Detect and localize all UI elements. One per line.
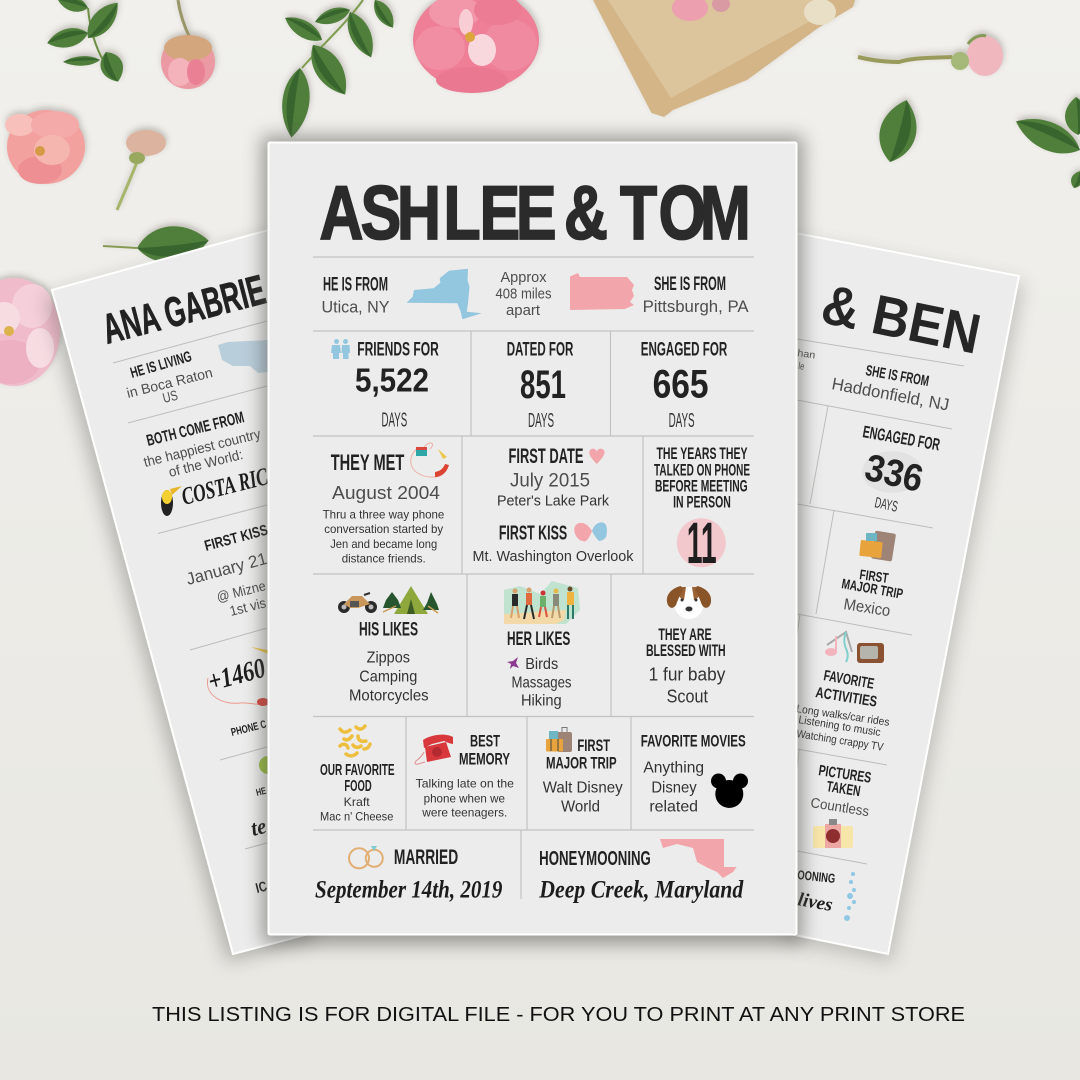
dated for: DATED FOR bbox=[507, 340, 573, 360]
our favorite food: OUR FAVORITE bbox=[320, 762, 395, 779]
they met: distance friends. bbox=[342, 552, 426, 566]
leaves far right bbox=[1010, 96, 1080, 190]
icon: mouse ears bbox=[711, 774, 748, 808]
engaged for: 665 bbox=[653, 362, 709, 406]
icon: dog bbox=[667, 586, 711, 619]
first major trip bbox=[543, 736, 623, 816]
right card dividers and text: Mexico bbox=[842, 596, 892, 620]
left card dividers and text: in Boca Raton bbox=[125, 364, 214, 401]
her likes: Hiking bbox=[521, 693, 562, 710]
right card dividers and text: Haddonfield, NJ bbox=[830, 374, 951, 415]
phone cord and plane bbox=[207, 647, 269, 706]
right card dividers and text bbox=[796, 339, 964, 916]
map: Pennsylvania bbox=[570, 273, 634, 310]
left card dividers and text: HE IS LIVING bbox=[128, 348, 194, 382]
right card dividers and text: DAYS bbox=[873, 494, 899, 516]
friends for: DAYS bbox=[382, 410, 407, 432]
left card title: ANA GABRIE bbox=[97, 266, 270, 353]
grid lines bbox=[313, 257, 754, 899]
blessed with: THEY ARE bbox=[658, 625, 712, 644]
grey ellipse behind engaged number bbox=[862, 451, 922, 493]
panel: main card bbox=[268, 142, 796, 934]
blessed with bbox=[646, 625, 726, 706]
panel: right card bbox=[780, 230, 1023, 962]
best memory: BEST bbox=[470, 732, 500, 751]
distance apart bbox=[496, 269, 552, 319]
his likes: Zippos bbox=[367, 650, 410, 667]
married bbox=[315, 846, 503, 903]
icon: purple bird bbox=[507, 657, 519, 669]
sprig top left bbox=[45, 0, 128, 86]
map: New York bbox=[407, 269, 482, 319]
right card title: & BEN bbox=[817, 272, 986, 366]
leaf right bbox=[873, 96, 924, 167]
icon: blue drops bbox=[844, 872, 856, 921]
her likes: HER LIKES bbox=[507, 629, 570, 650]
right card dividers and text: le bbox=[798, 361, 805, 373]
rose bud right bbox=[858, 35, 1003, 76]
years on phone bbox=[654, 444, 750, 512]
left card dividers and text: PHONE C bbox=[230, 719, 268, 739]
blessed with: Scout bbox=[667, 686, 708, 706]
best memory bbox=[416, 732, 514, 819]
engaged for: DAYS bbox=[669, 410, 695, 432]
years on phone: BEFORE MEETING bbox=[655, 477, 748, 496]
they met bbox=[323, 450, 445, 566]
icon: hikers bbox=[504, 581, 580, 624]
he is from: Utica, NY bbox=[322, 298, 390, 316]
section: wedding bbox=[315, 839, 744, 903]
they met: THEY MET bbox=[331, 450, 405, 475]
best memory: phone when we bbox=[424, 791, 505, 805]
title: ASHLEE & TOM bbox=[320, 171, 751, 256]
left card dividers and text bbox=[113, 321, 271, 896]
engaged for bbox=[641, 340, 727, 432]
left card dividers and text: IC bbox=[254, 878, 268, 896]
left card dividers and text: 1st vis bbox=[228, 594, 268, 619]
left card dividers and text: HE bbox=[255, 786, 268, 799]
favorite movies: Anything bbox=[643, 760, 704, 777]
icon: motorcycle bbox=[338, 593, 377, 613]
friends for: 5,522 bbox=[355, 362, 429, 398]
kraft paper parcel bbox=[593, 0, 855, 117]
first major trip: Walt Disney bbox=[543, 780, 623, 797]
first major trip: World bbox=[561, 799, 600, 816]
left card dividers and text: +1460 bbox=[205, 653, 269, 698]
shadow of main card bbox=[262, 136, 803, 944]
favorite movies bbox=[641, 732, 746, 816]
number badge: 11 bbox=[687, 511, 717, 576]
right card dividers and text: Listening to music bbox=[798, 714, 882, 739]
blessed with: BLESSED WITH bbox=[646, 641, 726, 660]
scattered flowers and leaves bbox=[0, 0, 1080, 386]
favorite movies: Disney bbox=[651, 780, 697, 797]
our favorite food bbox=[320, 762, 395, 824]
right card dividers and text: Long walks/car rides bbox=[796, 703, 891, 729]
section: durations bbox=[331, 339, 727, 432]
right card dividers and text: ACTIVITIES bbox=[814, 684, 878, 711]
first date bbox=[497, 445, 609, 510]
left card dividers and text: US bbox=[161, 387, 179, 406]
right card dividers and text: FAVORITE bbox=[822, 667, 875, 693]
map: Maryland bbox=[660, 839, 737, 878]
honeymooning bbox=[538, 848, 744, 903]
years on phone: TALKED ON PHONE bbox=[654, 460, 750, 479]
left card dividers and text: of the World: bbox=[167, 446, 244, 480]
years on phone: IN PERSON bbox=[673, 493, 731, 512]
left card dividers and text: BOTH COME FROM bbox=[145, 409, 246, 450]
she is from: Pittsburgh, PA bbox=[643, 297, 749, 316]
icon: wedding rings bbox=[349, 846, 383, 868]
left card dividers and text: the happiest country bbox=[142, 425, 262, 470]
first date: Peter's Lake Park bbox=[497, 492, 609, 510]
distance apart: 408 miles bbox=[496, 286, 552, 302]
left card dividers and text: FIRST KISS bbox=[203, 522, 270, 555]
his likes: Camping bbox=[359, 669, 417, 686]
right card dividers and text: lives bbox=[796, 889, 834, 916]
first kiss bbox=[472, 522, 634, 565]
first major trip: FIRST bbox=[577, 736, 610, 755]
sprig top centre bbox=[278, 0, 399, 139]
engaged for: ENGAGED FOR bbox=[641, 340, 727, 360]
he is from: HE IS FROM bbox=[323, 274, 388, 296]
they met: August 2004 bbox=[332, 483, 440, 503]
number badge bbox=[677, 511, 726, 576]
favorite movies: FAVORITE MOVIES bbox=[641, 732, 746, 751]
left card dividers and text: COSTA RIC bbox=[179, 463, 271, 511]
best memory: were teenagers. bbox=[421, 805, 507, 819]
icon: tent and trees bbox=[383, 586, 439, 614]
friends for bbox=[355, 340, 439, 432]
his likes: HIS LIKES bbox=[359, 620, 418, 641]
section: origins bbox=[322, 269, 749, 319]
first date: July 2015 bbox=[510, 470, 590, 492]
dated for: DAYS bbox=[528, 410, 554, 432]
best memory: Talking late on the bbox=[416, 777, 514, 791]
blessed with: 1 fur baby bbox=[649, 665, 725, 685]
first major trip: MAJOR TRIP bbox=[546, 753, 617, 772]
icon: music notes bbox=[825, 632, 852, 662]
her likes: Birds bbox=[525, 656, 558, 673]
icon: right card suitcases bbox=[859, 531, 896, 562]
toucan icon bbox=[161, 486, 182, 516]
section: favorites bbox=[320, 726, 748, 824]
right card dividers and text: FIRST bbox=[859, 566, 890, 586]
she is from: SHE IS FROM bbox=[654, 274, 726, 295]
our favorite food: Kraft bbox=[344, 795, 370, 809]
right card dividers and text: Countless bbox=[810, 794, 870, 819]
leaf behind left card bbox=[103, 223, 210, 266]
first kiss: Mt. Washington Overlook bbox=[472, 548, 634, 565]
icon: camera bbox=[813, 819, 853, 848]
left card dividers and text: te bbox=[248, 813, 269, 841]
they met: Thru a three way phone bbox=[323, 507, 445, 521]
right card dividers and text: 336 bbox=[861, 447, 927, 501]
right card dividers and text: OONING bbox=[797, 867, 836, 886]
section: likes bbox=[338, 581, 726, 710]
tennis ball bbox=[259, 756, 277, 774]
pink rose left bbox=[5, 110, 85, 184]
left card dividers and text: @ Mizne bbox=[215, 577, 267, 605]
panel: left card bbox=[46, 224, 320, 962]
left card dividers and text: January 21 bbox=[184, 549, 269, 589]
right card dividers and text: TAKEN bbox=[825, 778, 862, 800]
small bud left bbox=[117, 130, 166, 210]
they met: conversation started by bbox=[324, 522, 443, 536]
our favorite food: Mac n' Cheese bbox=[320, 810, 394, 824]
honeymooning: HONEYMOONING bbox=[539, 848, 651, 870]
best memory: MEMORY bbox=[459, 749, 510, 768]
pink flower top bbox=[413, 0, 539, 93]
section: how they met bbox=[323, 443, 750, 576]
left card USA map bbox=[218, 340, 268, 373]
dated for: 851 bbox=[520, 363, 566, 407]
right card dividers and text: ENGAGED FOR bbox=[861, 422, 941, 454]
favorite movies: related bbox=[649, 799, 698, 816]
our favorite food: FOOD bbox=[344, 778, 372, 795]
they met: Jen and became long bbox=[330, 537, 437, 551]
honeymooning: Deep Creek, Maryland bbox=[538, 876, 744, 903]
she is from bbox=[643, 274, 749, 316]
married: September 14th, 2019 bbox=[315, 876, 503, 903]
his likes bbox=[349, 620, 429, 705]
icon: suitcases bbox=[546, 728, 572, 752]
right card dividers and text: han bbox=[797, 348, 816, 361]
right card dividers and text: MAJOR TRIP bbox=[840, 575, 904, 602]
her likes: Massages bbox=[512, 674, 572, 691]
years on phone: THE YEARS THEY bbox=[656, 444, 748, 463]
icon: heart bbox=[589, 449, 605, 464]
distance apart: apart bbox=[506, 302, 541, 319]
first date: FIRST DATE bbox=[508, 445, 584, 468]
her likes bbox=[507, 629, 572, 710]
bud top left bbox=[161, 0, 215, 89]
dated for bbox=[507, 340, 573, 432]
footer notice: THIS LISTING IS FOR DIGITAL FILE - FOR YOU TO PRINT AT ANY PRINT STORE bbox=[152, 1004, 965, 1026]
icon: phone cord bbox=[411, 443, 449, 477]
friends for: FRIENDS FOR bbox=[357, 340, 439, 360]
icon: television bbox=[857, 643, 884, 663]
icon: red telephone bbox=[415, 735, 453, 764]
his likes: Motorcycles bbox=[349, 688, 429, 705]
icon: kissing silhouettes bbox=[574, 522, 607, 542]
right card dividers and text: Watching crappy TV bbox=[796, 728, 885, 754]
pale flower lower left bbox=[0, 278, 60, 386]
right card dividers and text: SHE IS FROM bbox=[864, 362, 930, 390]
first kiss: FIRST KISS bbox=[499, 522, 567, 544]
right card dividers and text: PICTURES bbox=[817, 762, 872, 787]
he is from bbox=[322, 274, 390, 316]
married: MARRIED bbox=[394, 846, 458, 869]
icon: macaroni bbox=[340, 726, 370, 756]
icon: friends bbox=[331, 339, 350, 359]
distance apart: Approx bbox=[500, 269, 547, 286]
